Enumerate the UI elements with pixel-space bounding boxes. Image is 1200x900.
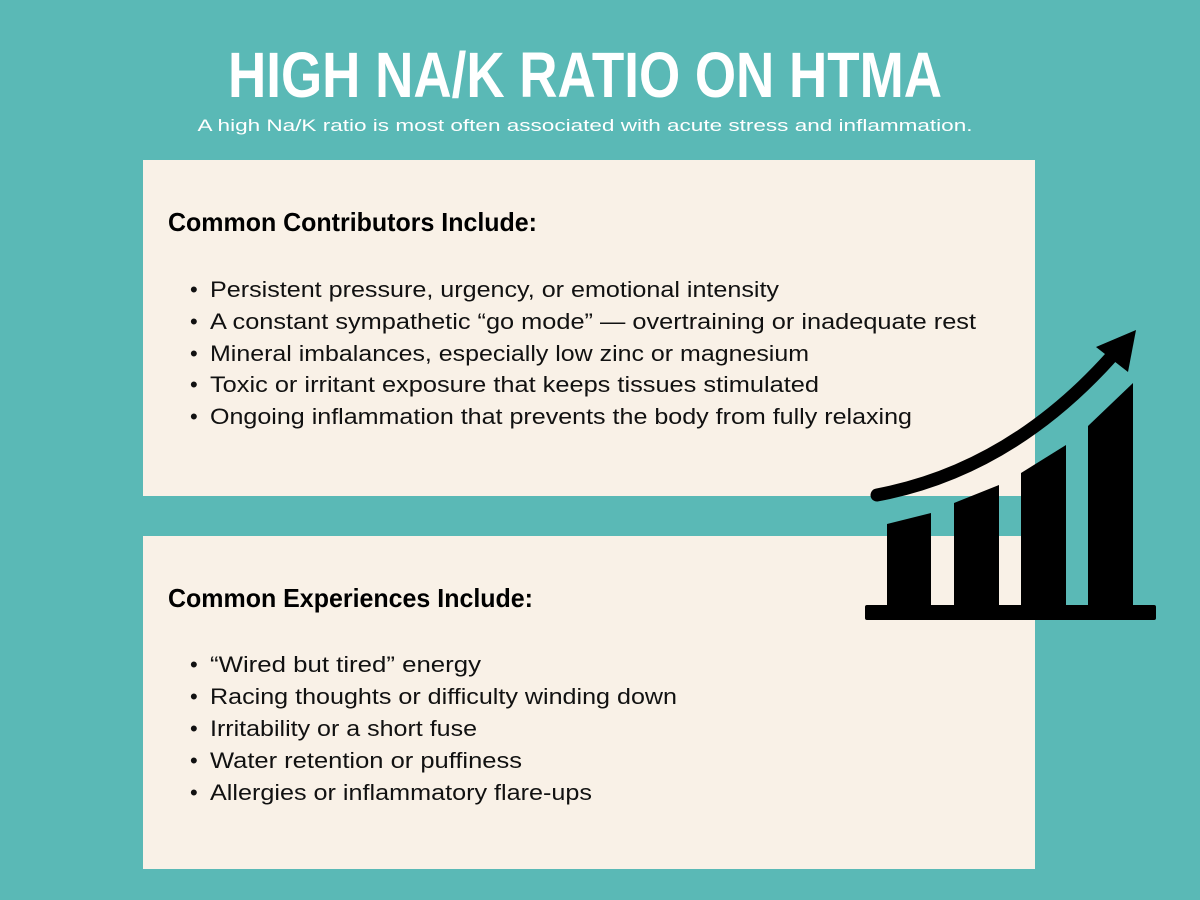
list: experiences: • [190, 780, 198, 805]
list: contributors: • [190, 372, 198, 397]
list: contributors: Toxic or irritant exposure that keeps tissues stimulated [210, 372, 819, 397]
list: contributors [190, 277, 976, 429]
list: experiences: Racing thoughts or difficulty winding down [210, 684, 677, 709]
panel: experiences [143, 536, 1035, 869]
list: experiences: “Wired but tired” energy [210, 652, 481, 677]
list: experiences: • [190, 748, 198, 773]
title: HIGH NA/K RATIO ON HTMA [228, 39, 942, 111]
heading: experiences: Common Experiences Include: [168, 583, 533, 613]
list: experiences: Allergies or inflammatory flare-ups [210, 780, 592, 805]
list: experiences [190, 652, 677, 805]
list: contributors: • [190, 341, 198, 366]
heading: contributors: Common Contributors Include: [168, 207, 537, 237]
list: experiences: Water retention or puffiness [210, 748, 522, 773]
list: experiences: • [190, 652, 198, 677]
subtitle: A high Na/K ratio is most often associated with acute stress and inflammation. [198, 116, 972, 135]
list: contributors: A constant sympathetic “go mode” — overtraining or inadequate rest [210, 309, 976, 334]
list: experiences: • [190, 716, 198, 741]
list: contributors: Mineral imbalances, especially low zinc or magnesium [210, 341, 809, 366]
list: experiences: Irritability or a short fuse [210, 716, 477, 741]
list: experiences: • [190, 684, 198, 709]
list: contributors: • [190, 309, 198, 334]
icon: rising bar chart [865, 330, 1156, 620]
list: contributors: • [190, 277, 198, 302]
list: contributors: Ongoing inflammation that prevents the body from fully relaxing [210, 404, 912, 429]
list: contributors: • [190, 404, 198, 429]
list: contributors: Persistent pressure, urgency, or emotional intensity [210, 277, 779, 302]
panel: contributors [143, 160, 1035, 496]
